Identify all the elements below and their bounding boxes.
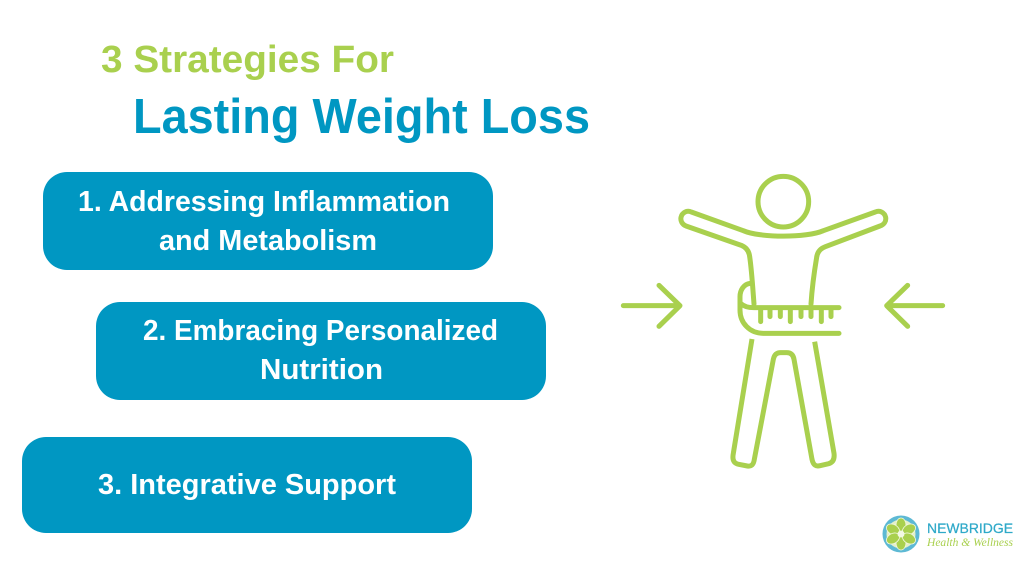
arrow: right (887, 285, 943, 326)
panel: strategy 3: 3. Integrative Support (98, 469, 396, 501)
logo: Newbridge Health & Wellness (882, 516, 1014, 552)
icon: head (758, 176, 809, 227)
panel: strategy 1: 1. Addressing Inflammation (78, 186, 450, 218)
title line 1: 3 Strategies For (101, 39, 394, 81)
panel: strategy 3 (22, 437, 472, 533)
logo: flower mark (882, 516, 920, 552)
panel: strategy 2 (96, 302, 546, 400)
logo: wordmark: NEWBRIDGE (927, 520, 1013, 536)
icon: arms and torso (681, 211, 886, 304)
panel: strategy 2: 2. Embracing Personalized (143, 315, 498, 347)
icon: legs (733, 339, 834, 466)
logo: tagline: Health & Wellness (926, 537, 1014, 549)
icon: body with measuring tape and arrows (623, 176, 943, 466)
arrow: left (623, 285, 680, 326)
panel: strategy 2: Nutrition (260, 354, 383, 386)
panel: strategy 1: and Metabolism (159, 225, 377, 257)
panel: strategy 1 (43, 172, 493, 270)
icon: measuring tape (740, 283, 839, 333)
title line 2: Lasting Weight Loss (133, 90, 590, 144)
